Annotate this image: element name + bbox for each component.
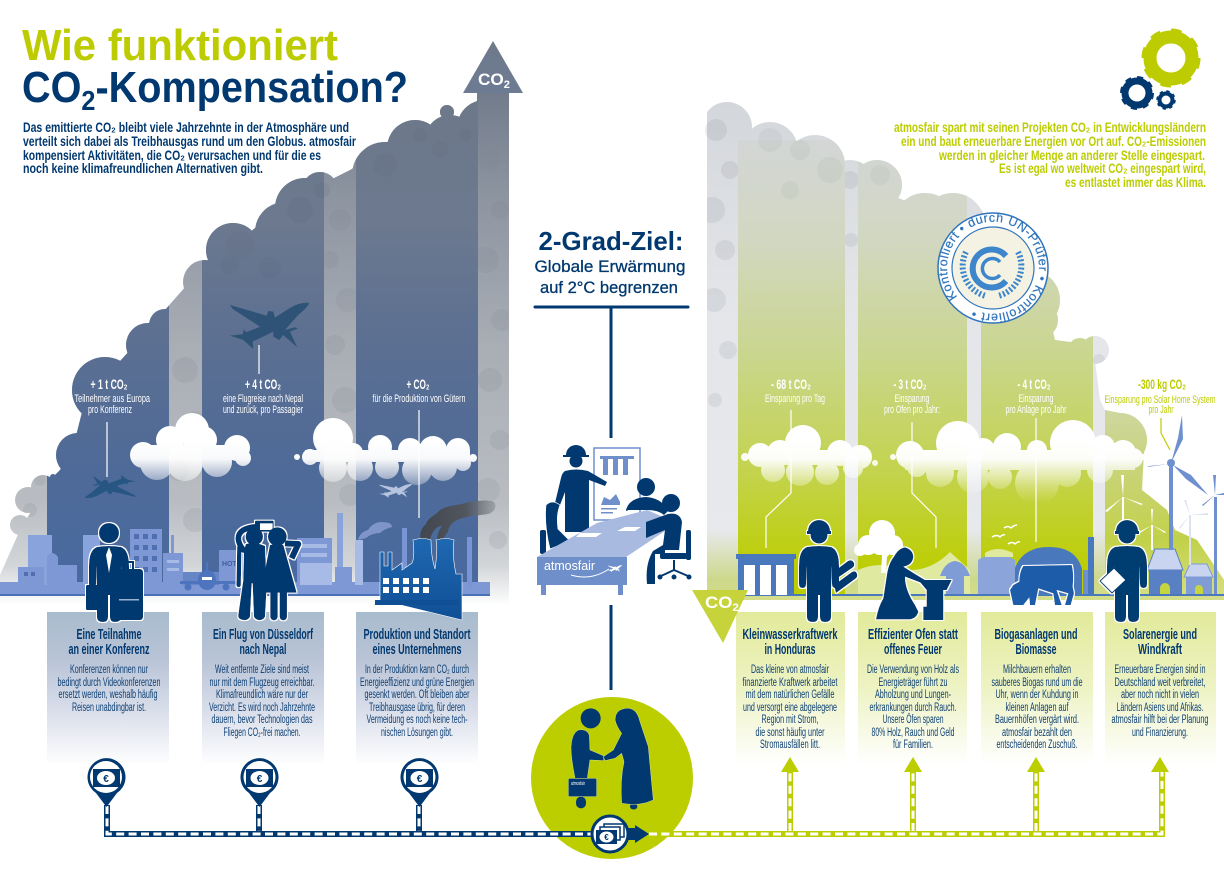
panel: solar and wind: und Finanzierung.	[1132, 727, 1188, 739]
panel: CO2 savings cloud	[699, 95, 1224, 600]
label: hydro	[765, 377, 825, 405]
skyline: left: HOT	[222, 561, 238, 568]
panel: biogas: Biomasse	[1016, 641, 1056, 658]
pin: production	[400, 758, 439, 807]
panel: biogas: Uhr, wenn der Kuhdung in	[996, 689, 1078, 701]
panel: hydro: Region mit Strom,	[762, 714, 818, 726]
figure: traveller with suitcase	[86, 523, 143, 622]
circle: partnership handshake: atmosfair	[571, 781, 585, 787]
panel: production	[356, 612, 478, 765]
panel: stove: Die Verwendung von Holz als	[867, 664, 959, 676]
label: stove	[884, 377, 940, 416]
icon: money transfer: €	[604, 833, 609, 842]
intro text: Das emittierte CO₂ bleibt viele Jahrzehnte in der Atmosphäre und	[23, 120, 349, 135]
label: solar: pro Jahr	[1148, 404, 1174, 416]
label: biogas: pro Anlage pro Jahr	[1006, 404, 1067, 416]
seal: UN: Kontrolliert • durch UN-Prüfer • Kontrolliert •	[939, 212, 1046, 322]
panel: conference: bedingt durch Videokonferenzen	[58, 677, 160, 689]
heading: 2-Grad-Ziel: 2-Grad-Ziel:	[538, 226, 684, 256]
panel: biogas: sauberes Biogas rund um die	[992, 677, 1082, 689]
panel: stove: 80% Holz, Rauch und Geld	[872, 727, 954, 739]
panel: stove: offenes Feuer	[884, 641, 942, 658]
arrow: CO2 down	[692, 590, 748, 643]
label: production	[372, 377, 466, 405]
panel: flight: nur mit dem Flugzeug erreichbar.	[210, 677, 314, 689]
panel: stove: Abholzung und Lungen-	[875, 689, 951, 701]
money flow: navy	[107, 805, 640, 834]
heading: 2-Grad-Ziel: Globale Erwärmung	[534, 257, 686, 276]
title: CO	[22, 63, 88, 112]
panel: solar and wind	[1105, 612, 1216, 765]
label: biogas: Einsparung	[1018, 393, 1054, 405]
arrow: CO2 down: 2	[732, 602, 739, 614]
pin: conference	[87, 758, 126, 807]
label: conference: + 1 t CO₂	[90, 377, 128, 392]
panel: hydro: Stromausfällen litt.	[760, 739, 820, 751]
skyline: right	[854, 520, 1213, 596]
title: Wie funktioniert	[22, 21, 338, 70]
plane: factory area	[379, 484, 412, 498]
panel: biogas: Bauernhöfen vergärt wird.	[995, 714, 1079, 726]
panel: hydro: Kleinwasserkraftwerk	[742, 626, 838, 643]
label: stove: pro Ofen pro Jahr:	[884, 404, 940, 416]
illustration: meeting	[537, 445, 692, 595]
ground line: right	[736, 594, 1224, 596]
intro text: noch keine klimafreundlichen Alternativen gibt.	[23, 161, 263, 176]
arrow: CO2 down: CO	[705, 593, 730, 612]
panel: conference: Konferenzen können nur	[70, 664, 148, 676]
label: production: + CO₂	[406, 377, 430, 392]
panel: production: nischen Lösungen gibt.	[381, 727, 453, 739]
arrow heads: green	[781, 757, 1169, 772]
label: biogas: - 4 t CO₂	[1018, 377, 1051, 392]
panel: flight: Fliegen CO₂-frei machen.	[224, 727, 300, 739]
panel: solar and wind: Windkraft	[1138, 641, 1182, 658]
target lines	[535, 307, 688, 690]
label: hydro: Einsparung pro Tag	[765, 393, 825, 405]
panel: biogas	[981, 612, 1093, 765]
panel: hydro: die sonst häufig unter	[756, 727, 825, 739]
panel: flight	[202, 612, 324, 765]
panel: production: Vermeidung es noch keine tech-	[366, 714, 468, 726]
arrow: CO2 up: CO	[478, 70, 504, 89]
label: production: für die Produktion von Gütern	[372, 393, 466, 405]
plane: conference flight	[85, 475, 136, 498]
panel: flight: dauern, bevor Technologien das	[212, 714, 313, 726]
arrow: CO2 up: 2	[504, 79, 510, 91]
label: flight: und zurück, pro Passagier	[223, 404, 303, 416]
panel: biogas: Biogasanlagen und	[994, 626, 1078, 643]
panel: stove: erkrankungen durch Rauch.	[870, 702, 956, 714]
pin: flight	[241, 758, 278, 807]
plane: large flight	[230, 303, 309, 349]
panel: stove: Unsere Öfen sparen	[882, 714, 944, 726]
illustration: meeting: atmosfair	[544, 558, 596, 573]
cloud: right 2	[890, 420, 1146, 505]
label: hydro: - 68 t CO₂	[771, 377, 811, 392]
panel: production: In der Produktion kann CO₂ durch	[365, 664, 469, 676]
panel: conference: Eine Teilnahme	[76, 626, 142, 643]
wind turbines	[1105, 415, 1224, 595]
connector lines: right	[766, 410, 1036, 548]
label: conference: pro Konferenz	[88, 404, 132, 416]
icon: hydro plant	[736, 554, 796, 595]
heading: 2-Grad-Ziel: auf 2°C begrenzen	[540, 278, 678, 297]
panel: stove: für Familien.	[893, 739, 933, 751]
figure: woman at stove	[876, 547, 952, 620]
panel: biogas: Milchbauern erhalten	[1003, 664, 1071, 676]
title: 2	[81, 85, 95, 116]
figure: engineer with clipboard	[1100, 520, 1147, 622]
pin: production: €	[417, 774, 423, 785]
panel: hydro: Das kleine von atmosfair	[751, 664, 829, 676]
figure: engineer with plans	[799, 520, 857, 622]
panel: flight: Klimafreundlich wäre nur der	[216, 689, 308, 701]
panel: hydro: in Honduras	[764, 641, 816, 658]
panel: hydro	[736, 612, 845, 765]
panel: biogas: atmosfair bezahlt den	[1002, 727, 1072, 739]
label: flight	[223, 377, 303, 416]
panel: hydro: und versorgt eine abgelegene	[743, 702, 837, 714]
intro text: verteilt sich dabei als Treibhausgas rund um den Globus. atmosfair	[23, 134, 357, 149]
panel: stove	[858, 612, 967, 765]
icon: money transfer	[592, 816, 649, 852]
connector lines: left	[107, 345, 419, 518]
panel: biogas: kleinen Anlagen auf	[1006, 702, 1069, 714]
label: solar: -300 kg CO₂	[1138, 377, 1186, 392]
panel: production: Energieeffizienz und grüne Energien	[360, 677, 474, 689]
panel: stove: Effizienter Ofen statt	[868, 626, 958, 643]
panel: conference: Reisen unabdingbar ist.	[72, 702, 146, 714]
pin: flight: €	[257, 774, 263, 785]
figure: factory	[375, 501, 495, 620]
intro text	[23, 120, 357, 176]
icon: gears	[1122, 32, 1197, 108]
text: atmosfair projects	[894, 120, 1206, 190]
panel: production: gesenkt werden. Oft bleiben aber	[364, 689, 470, 701]
skyline: left	[0, 513, 490, 596]
label: conference	[64, 377, 151, 416]
connector line: solar	[1161, 418, 1170, 450]
panel: flight: Verzicht. Es wird noch Jahrzehnte	[209, 702, 315, 714]
panel: hydro: finanzierte Kraftwerk arbeitet	[742, 677, 838, 689]
cloud: right 1	[741, 425, 878, 486]
label: stove: - 3 t CO₂	[894, 377, 927, 392]
panel: production: Treibhausgase übrig, für deren	[369, 702, 465, 714]
circle: partnership handshake	[531, 697, 693, 859]
figure: couple with camera	[238, 521, 298, 620]
intro text: kompensiert Aktivitäten, die CO₂ verursachen und für die es	[23, 148, 321, 163]
panel: conference	[47, 612, 169, 765]
arrow: CO2 up	[463, 41, 523, 93]
cloud: left 2	[294, 418, 477, 485]
title	[22, 21, 408, 116]
cloud: left 1	[130, 413, 251, 481]
label: conference: für Teilnehmer aus Europa	[64, 393, 151, 405]
panel: flight: nach Nepal	[240, 641, 286, 658]
label: flight: + 4 t CO₂	[245, 377, 281, 392]
panel: flight: Weit entfernte Ziele sind meist	[215, 664, 309, 676]
panel: CO2 emissions cloud	[0, 41, 523, 606]
panel: biogas: entscheidenden Zuschuß.	[996, 739, 1078, 751]
panel: stove: Energieträger führt zu	[878, 677, 948, 689]
money flow: green	[649, 770, 1162, 834]
figure: cow	[1010, 565, 1074, 605]
panel: conference: an einer Konferenz	[68, 641, 150, 658]
panel: flight: Ein Flug von Düsseldorf	[213, 626, 314, 643]
title: -Kompensation?	[95, 63, 408, 112]
label: biogas	[1006, 377, 1067, 416]
panel: conference: ersetzt werden, weshalb häufig	[58, 689, 158, 701]
panel: production: eines Unternehmens	[372, 641, 462, 658]
panel: production: Produktion und Standort	[364, 626, 470, 643]
label: stove: Einsparung	[894, 393, 930, 405]
heading: 2-Grad-Ziel	[534, 226, 686, 297]
pin: conference: €	[103, 774, 109, 785]
label: flight: eine Flugreise nach Nepal	[223, 393, 303, 405]
label: solar	[1104, 377, 1216, 416]
panel: hydro: mit dem natürlichen Gefälle	[746, 689, 834, 701]
